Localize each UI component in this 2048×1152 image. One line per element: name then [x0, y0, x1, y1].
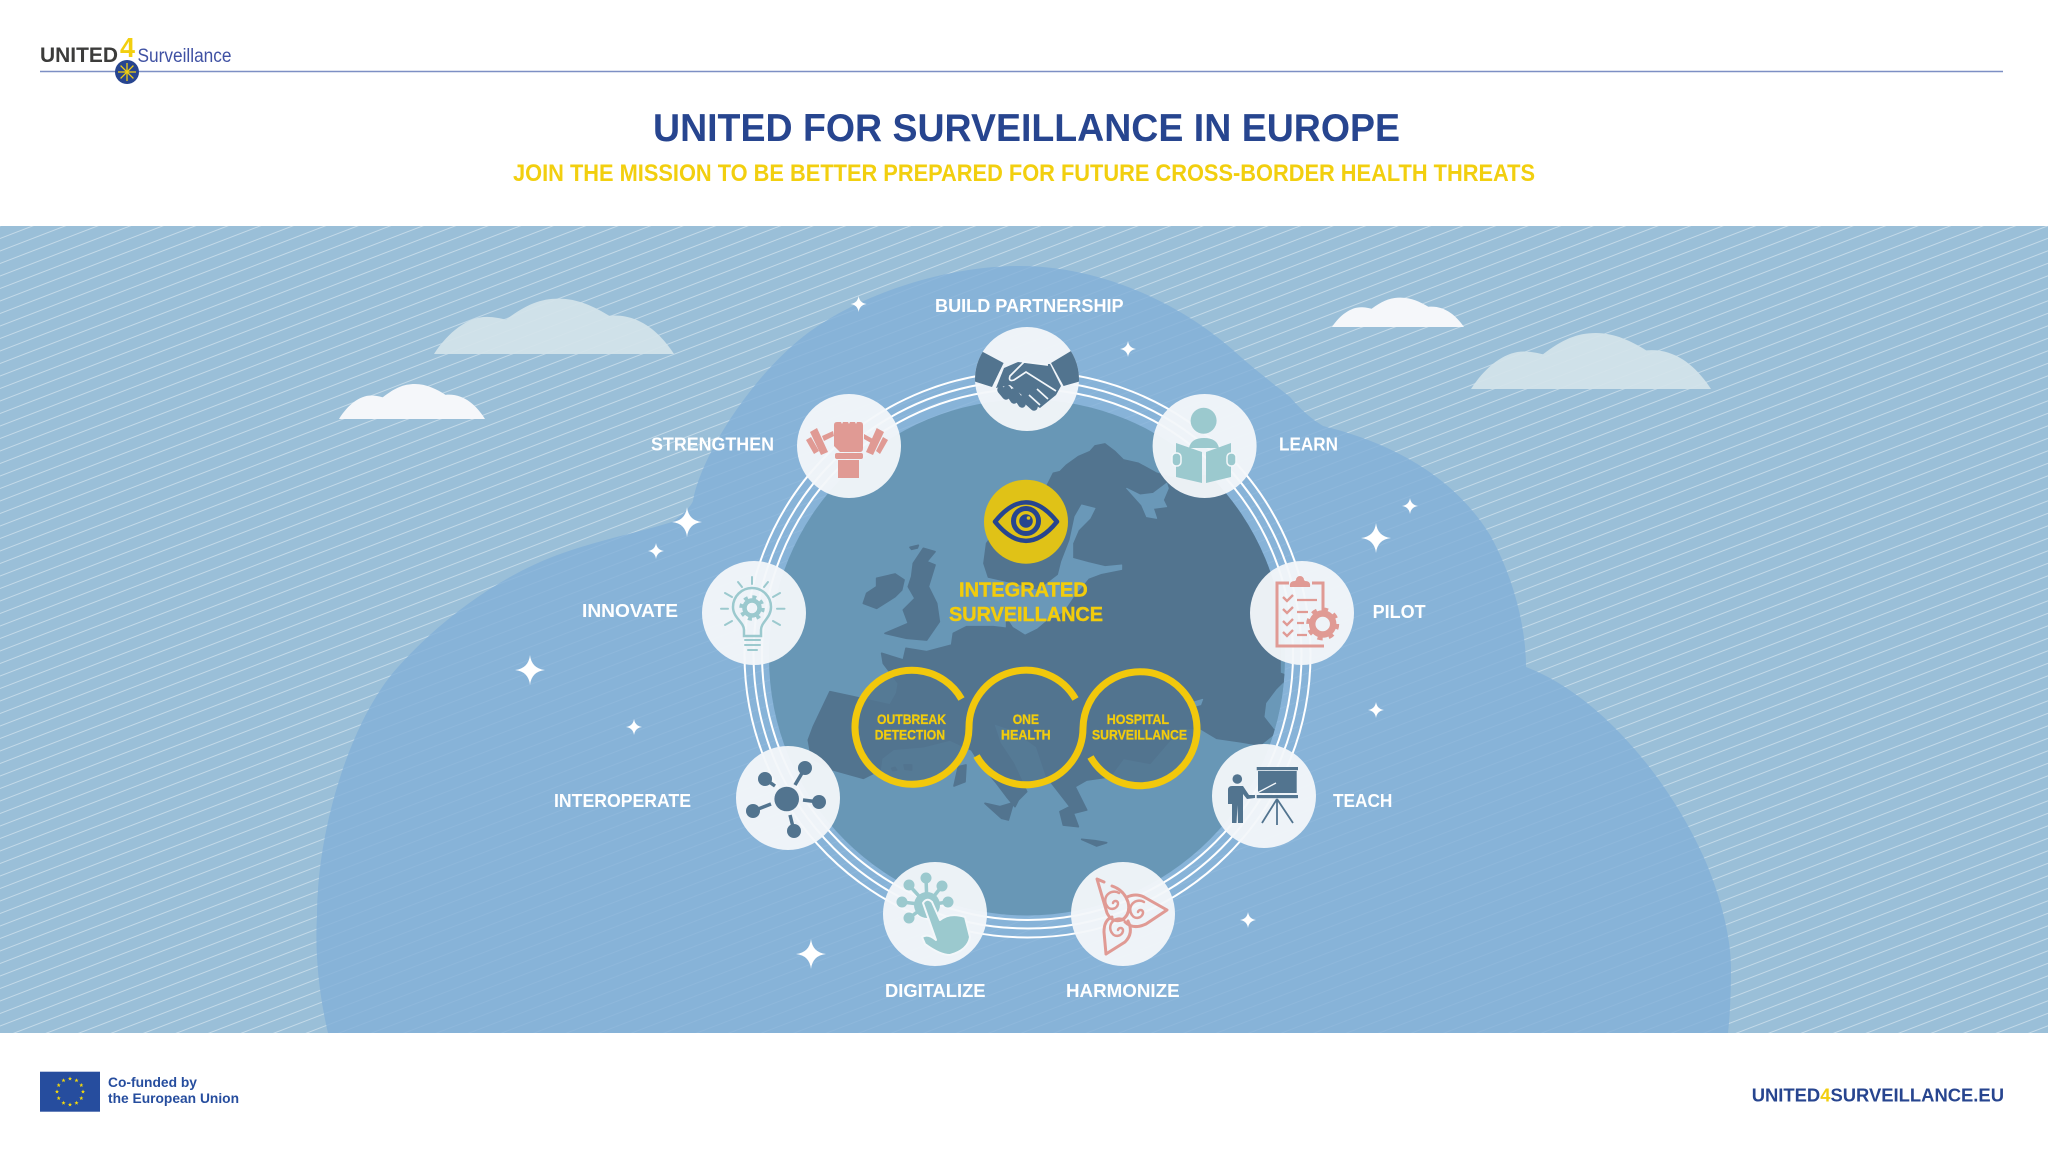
- cloud: white left: [339, 384, 485, 419]
- co-funded text: [108, 1075, 239, 1106]
- subtitle: JOIN THE MISSION TO BE BETTER PREPARED FOR FUTURE CROSS-BORDER HEALTH THREATS: [513, 160, 1535, 187]
- label: one health: HEALTH: [1001, 727, 1051, 742]
- labels around the ring: LEARN: [1279, 434, 1338, 455]
- header logo: UNITED: [40, 44, 118, 67]
- label: outbreak detection: OUTBREAK: [877, 712, 946, 727]
- heading: integrated surveillance: [949, 579, 1103, 626]
- icon: learn: [1153, 394, 1257, 498]
- label: hospital surveillance: [1092, 712, 1187, 742]
- label: outbreak detection: [875, 712, 946, 742]
- label: hospital surveillance: SURVEILLANCE: [1092, 727, 1187, 742]
- sparkle stars: [515, 296, 1418, 969]
- concentric rings: [744, 372, 1310, 938]
- label: one health: ONE: [1013, 712, 1039, 727]
- labels around the ring: TEACH: [1333, 790, 1392, 811]
- title: UNITED FOR SURVEILLANCE IN EUROPE: [653, 107, 1400, 150]
- heading: integrated surveillance: SURVEILLANCE: [949, 603, 1103, 626]
- three linked circles: [855, 670, 1197, 786]
- labels around the ring: BUILD PARTNERSHIP: [935, 295, 1124, 316]
- cloud: white right: [1332, 298, 1464, 327]
- co-funded text: the European Union: [108, 1091, 239, 1106]
- label: one health: [1001, 712, 1051, 742]
- cloud: pale left: [434, 299, 674, 354]
- icon: strengthen: [797, 394, 901, 498]
- heading: integrated surveillance: INTEGRATED: [959, 579, 1088, 602]
- large background cloud: [316, 266, 1731, 1033]
- labels around the ring: INNOVATE: [582, 600, 678, 621]
- arc link two: [976, 672, 1197, 786]
- globe disc: [769, 400, 1285, 916]
- icon: innovate: [702, 561, 806, 665]
- labels around the ring: STRENGTHEN: [651, 434, 774, 455]
- icon: handshake: [970, 327, 1085, 431]
- header logo: Surveillance: [138, 46, 232, 67]
- labels around the ring: INTEROPERATE: [554, 790, 691, 811]
- panel: sky band: [0, 226, 2048, 1033]
- labels around the ring: PILOT: [1373, 601, 1426, 622]
- icon: harmonize: [1071, 862, 1175, 966]
- icon: teach: [1212, 744, 1316, 848]
- eye badge: [984, 480, 1068, 564]
- header logo: [40, 32, 2003, 84]
- label: outbreak detection: DETECTION: [875, 727, 945, 742]
- website url: UNITED4SURVEILLANCE.EU: [1752, 1085, 2004, 1106]
- labels around the ring: [554, 295, 1426, 1001]
- map of Europe: [808, 444, 1290, 846]
- arc link one: [855, 670, 1076, 784]
- label: hospital surveillance: HOSPITAL: [1107, 712, 1169, 727]
- labels around the ring: HARMONIZE: [1066, 980, 1180, 1001]
- icon: interoperate: [736, 746, 840, 850]
- EU flag: [40, 1072, 100, 1112]
- icon: digitalize: [883, 862, 987, 966]
- co-funded text: Co-funded by: [108, 1075, 197, 1090]
- icon: pilot: [1250, 561, 1354, 665]
- header logo: 4: [120, 32, 135, 63]
- cloud: pale right: [1471, 333, 1711, 389]
- labels around the ring: DIGITALIZE: [885, 980, 986, 1001]
